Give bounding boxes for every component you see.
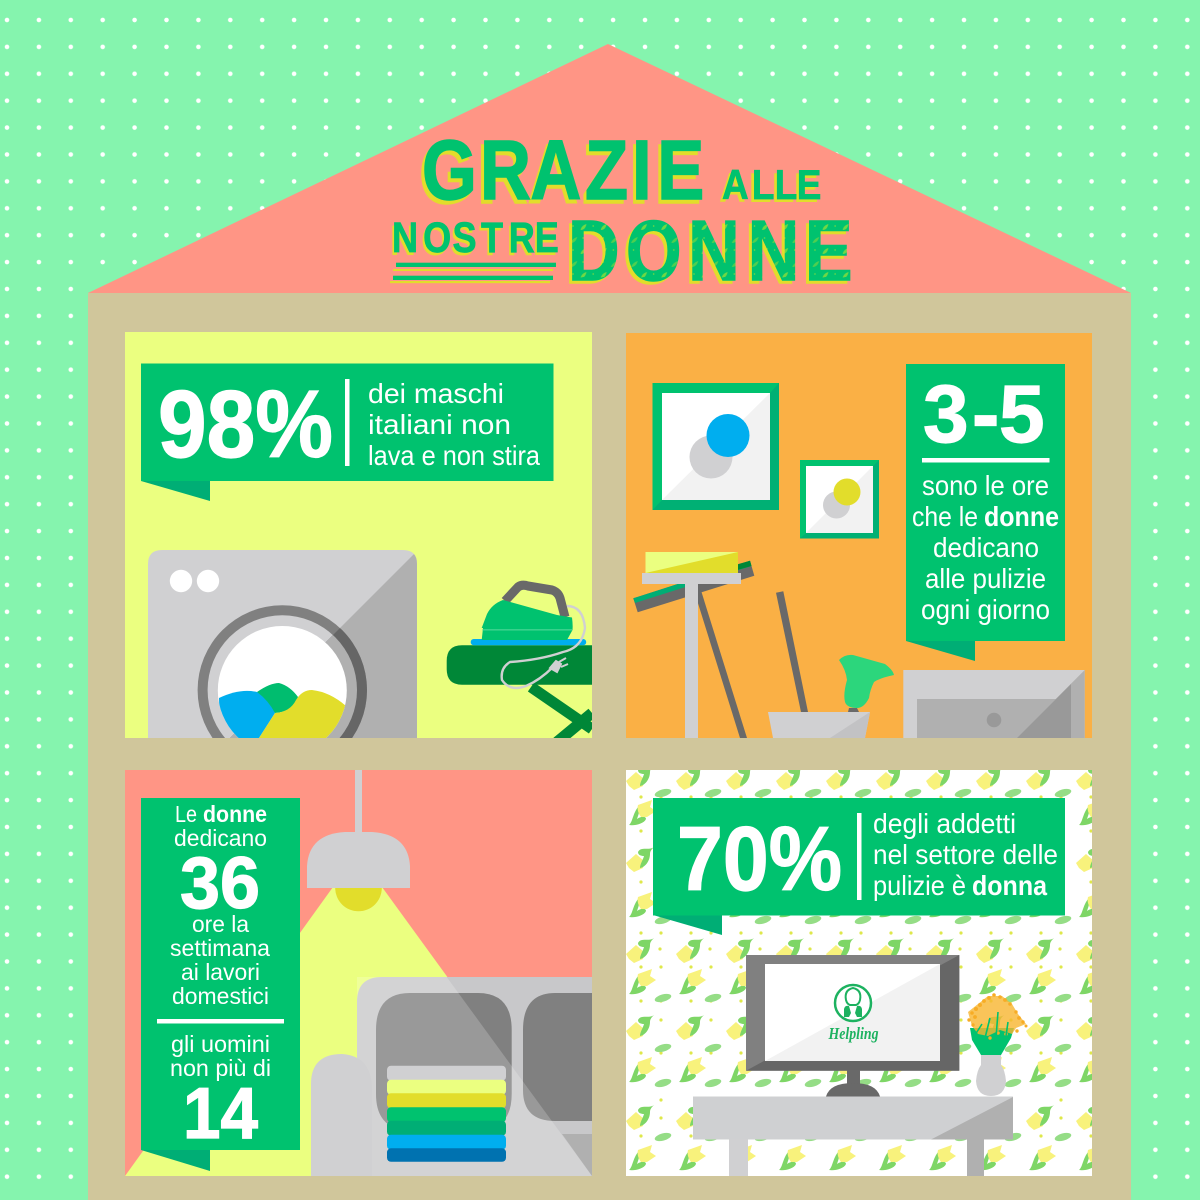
callout: 3-5 hours: sono le ore bbox=[922, 470, 1049, 501]
callout: 3-5 hours: ogni giorno bbox=[921, 594, 1050, 625]
callout: 36 and 14 hours: donne bbox=[203, 801, 267, 827]
title: DONNE bbox=[568, 203, 853, 298]
title: DONNE bbox=[565, 206, 850, 301]
icon: table bbox=[693, 1096, 1013, 1176]
callout: 98 percent bbox=[141, 364, 554, 501]
callout: 3-5 hours: che le bbox=[912, 501, 978, 532]
panel: cleaning bbox=[626, 333, 1092, 738]
callout: 70 percent: 70% bbox=[677, 809, 842, 910]
title: NOSTRE bbox=[392, 214, 559, 262]
logo: Helpling bbox=[828, 985, 879, 1043]
callout: 36 and 14 hours bbox=[141, 798, 300, 1171]
callout: 70 percent bbox=[653, 798, 1065, 935]
callout: 36 and 14 hours: settimana bbox=[170, 935, 270, 961]
title: GRAZIE bbox=[422, 124, 704, 217]
callout: 36 and 14 hours: domestici bbox=[172, 983, 269, 1009]
icon: large picture frame bbox=[652, 383, 779, 510]
callout: 70 percent: degli addetti bbox=[873, 808, 1016, 839]
callout: 98 percent: italiani non bbox=[368, 409, 511, 440]
callout: 36 and 14 hours: ore la bbox=[192, 911, 249, 937]
callout: 70 percent: donna bbox=[972, 870, 1047, 901]
logo: Helpling: Helpling bbox=[828, 1024, 879, 1043]
callout: 98 percent: 98% bbox=[158, 371, 333, 478]
callout: 3-5 hours: donne bbox=[984, 501, 1059, 532]
callout: 3-5 hours: 3-5 bbox=[923, 369, 1045, 460]
callout: 98 percent: dei maschi bbox=[368, 378, 504, 409]
callout: 3-5 hours: dedicano bbox=[933, 532, 1039, 563]
icon: plant bbox=[768, 655, 894, 738]
icon: ceiling lamp bbox=[307, 770, 410, 911]
callout: 36 and 14 hours: 36 bbox=[180, 843, 260, 924]
panel: laundry bbox=[125, 332, 592, 775]
lamp light beam bbox=[125, 888, 448, 1176]
icon: television bbox=[746, 955, 959, 1096]
callout: 3-5 hours bbox=[906, 364, 1065, 661]
icon: squeegee and mop bbox=[633, 552, 808, 738]
title: NOSTRE bbox=[390, 217, 557, 265]
icon: dresser bbox=[903, 670, 1085, 738]
icon: small picture frame bbox=[800, 460, 879, 538]
callout: 70 percent: nel settore delle bbox=[873, 839, 1058, 870]
icon: sofa bbox=[311, 977, 592, 1176]
title bbox=[390, 124, 853, 301]
icon: ironing board bbox=[447, 585, 592, 742]
callout: 98 percent: lava e non stira bbox=[368, 440, 540, 471]
callout: 3-5 hours: alle pulizie bbox=[925, 563, 1046, 594]
panel: wallpaper room bbox=[626, 770, 1092, 1176]
callout: 36 and 14 hours: dedicano bbox=[174, 825, 267, 851]
icon: washing machine bbox=[148, 550, 417, 738]
house roof bbox=[88, 44, 1131, 293]
house body bbox=[88, 293, 1131, 1200]
callout: 70 percent: pulizie è bbox=[873, 870, 966, 901]
title: ALLE bbox=[719, 165, 818, 212]
icon: vase with mimosa bbox=[967, 993, 1028, 1096]
callout: 36 and 14 hours: gli uomini bbox=[171, 1031, 270, 1057]
title: GRAZIE bbox=[419, 128, 701, 221]
title: ALLE bbox=[722, 162, 821, 209]
callout: 36 and 14 hours: Le bbox=[175, 801, 197, 827]
panel: living room bbox=[125, 770, 592, 1176]
callout: 36 and 14 hours: 14 bbox=[183, 1074, 258, 1154]
icon: folded towels bbox=[387, 1066, 506, 1162]
callout: 36 and 14 hours: non più di bbox=[170, 1055, 271, 1081]
callout: 36 and 14 hours: ai lavori bbox=[181, 959, 260, 985]
